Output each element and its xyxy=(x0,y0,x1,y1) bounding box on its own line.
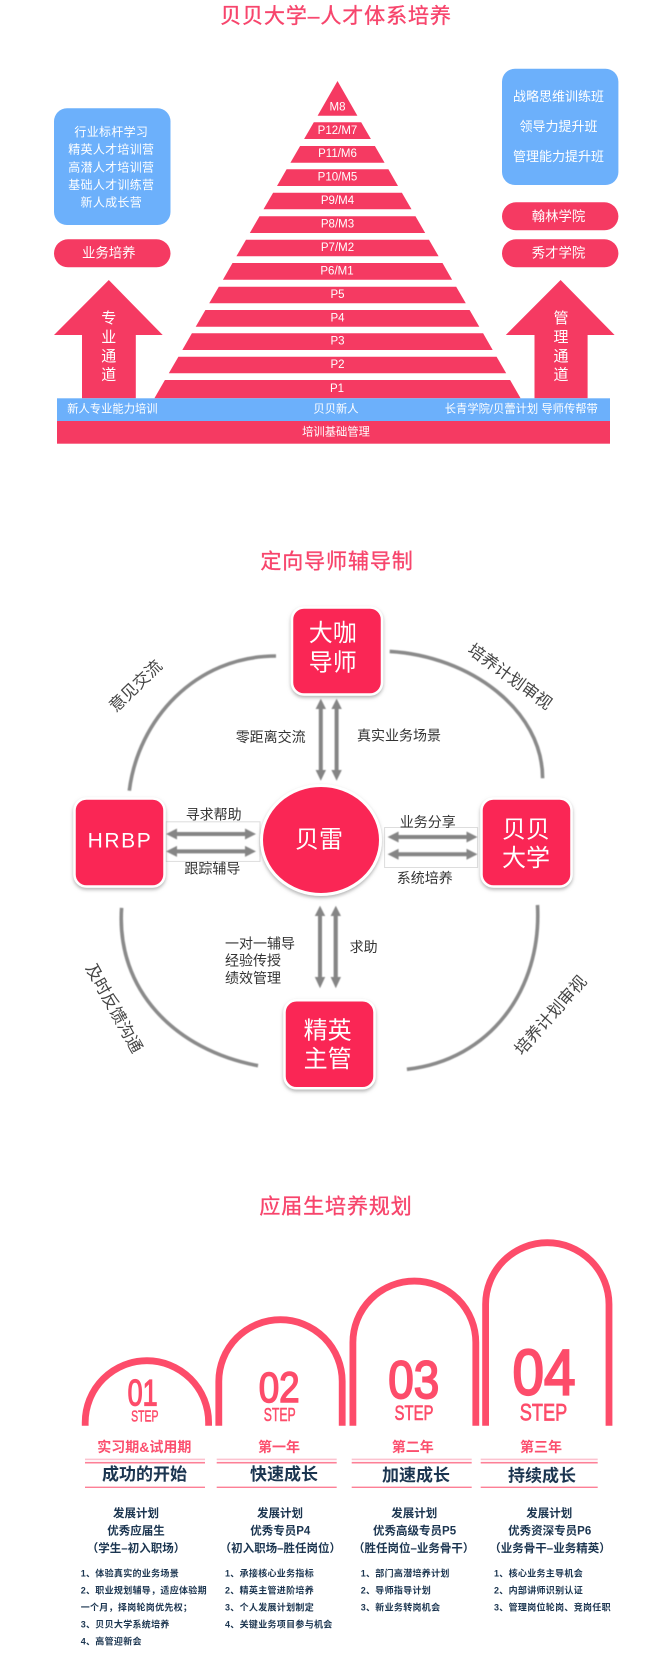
label: zero distance: 零距离交流 xyxy=(236,729,306,745)
arrow: management track: 通 xyxy=(553,348,569,365)
right blue box: management programs: 领导力提升班 xyxy=(519,119,598,134)
level P9/M4: P9/M4 xyxy=(321,195,355,207)
level P12/M7 xyxy=(304,122,371,139)
left blue box: business programs: 基础人才训练营 xyxy=(68,177,154,192)
level P11/M6: P11/M6 xyxy=(318,148,357,160)
node: Beibei University: 大学 xyxy=(502,845,550,872)
level M8: M8 xyxy=(330,101,345,113)
level P1 xyxy=(154,380,521,398)
right blue box: management programs: 战略思维训练班 xyxy=(513,89,604,104)
arrow: management track xyxy=(506,280,615,398)
step 1 arch xyxy=(85,1361,209,1426)
title: graduate plan: 应届生培养规划 xyxy=(259,1196,413,1218)
label: seek help: 寻求帮助 xyxy=(186,807,242,823)
right blue box: management programs xyxy=(502,69,618,185)
left blue box: business programs: 精英人才培训营 xyxy=(68,142,154,157)
column 2: 1、承接核心业务指标 xyxy=(225,1567,314,1578)
panel: graduate plan xyxy=(81,1196,611,1647)
pill: business training xyxy=(54,239,170,267)
node: elite supervisor: 精英 xyxy=(304,1018,352,1044)
level P11/M6 xyxy=(290,146,385,163)
node: Beilei center: 贝雷 xyxy=(295,826,343,854)
horizontal arrows left xyxy=(166,828,256,857)
node: HRBP: HRBP xyxy=(88,830,152,852)
node: Beilei center xyxy=(262,786,380,894)
blue base bar xyxy=(57,398,610,421)
left blue box: business programs: 行业标杆学习 xyxy=(74,124,148,139)
title: talent system: 贝贝大学–人才体系培养 xyxy=(220,5,452,28)
column 3: 第二年 xyxy=(392,1439,434,1455)
step 3 arch xyxy=(353,1281,476,1426)
arc label: timely feedback: 及时反馈沟通 xyxy=(82,960,146,1056)
level P12/M7: P12/M7 xyxy=(318,125,357,137)
blue base bar: 长青学院/贝蕾计划 导师传帮带 xyxy=(445,402,598,416)
arrow: professional track: 专 xyxy=(101,310,116,327)
step 2 arch: 02 xyxy=(259,1364,300,1412)
level P7/M2 xyxy=(236,240,439,256)
column 2: 快速成长 xyxy=(250,1464,318,1484)
column 3: 1、部门高潜培养计划 xyxy=(361,1567,450,1578)
blue base bar: 贝贝新人 xyxy=(313,402,359,416)
red base bar: 培训基础管理 xyxy=(302,424,370,438)
label: ask for help: 求助 xyxy=(350,939,378,955)
column 1: 1、体验真实的业务场景 xyxy=(81,1567,179,1578)
connector outlines xyxy=(166,822,478,868)
level P10/M5: P10/M5 xyxy=(318,172,357,184)
column 4: 3、管理岗位轮岗、竞岗任职 xyxy=(494,1602,611,1613)
vertical arrows upper xyxy=(316,699,342,781)
pill: Hanlin academy: 翰林学院 xyxy=(532,209,585,224)
step 3 arch: STEP xyxy=(394,1402,434,1425)
arrow: professional track: 通 xyxy=(101,348,116,365)
arrow: professional track: 业 xyxy=(101,329,116,346)
level P10/M5 xyxy=(277,169,398,186)
level P5: P5 xyxy=(330,289,345,301)
label: tracking: 跟踪辅导 xyxy=(184,861,240,877)
node: Beibei University: 贝贝 xyxy=(502,816,550,844)
node: HRBP xyxy=(74,798,164,886)
level P7/M2: P7/M2 xyxy=(321,242,354,254)
column 3: 优秀高级专员P5 xyxy=(373,1524,457,1538)
node: elite supervisor xyxy=(284,1000,374,1088)
label: business sharing: 业务分享 xyxy=(400,814,456,830)
column 1: 成功的开始 xyxy=(102,1464,187,1484)
column 4: 发展计划 xyxy=(526,1506,572,1520)
arc label: exchange views: 意见交流 xyxy=(105,656,166,716)
column 1: 4、高管迎新会 xyxy=(81,1636,142,1647)
column 2: （初入职场–胜任岗位） xyxy=(220,1541,341,1555)
pill: Hanlin academy xyxy=(502,202,618,230)
arrow: management track: 管 xyxy=(553,310,569,327)
column 1: 实习期&试用期 xyxy=(97,1439,191,1455)
level P4: P4 xyxy=(330,313,345,325)
step 2 arch xyxy=(219,1320,342,1426)
node: elite supervisor: 主管 xyxy=(304,1046,352,1073)
arc label: plan review top: 培养计划审视 xyxy=(464,640,556,713)
column 4 xyxy=(481,1439,611,1613)
level P4 xyxy=(196,310,479,327)
node: Beibei University xyxy=(482,798,572,886)
node: senior mentor: 大咖 xyxy=(309,620,357,647)
node: senior mentor xyxy=(292,608,382,694)
column 2 xyxy=(217,1439,341,1630)
label: system training: 系统培养 xyxy=(397,870,453,886)
column 1: 优秀应届生 xyxy=(107,1524,165,1538)
node: senior mentor: 导师 xyxy=(309,649,357,676)
column 2: 4、关键业务项目参与机会 xyxy=(225,1619,333,1630)
blue base bar: 新人专业能力培训 xyxy=(67,402,158,416)
arrow: professional track xyxy=(54,280,163,398)
column 4: 2、内部讲师识别认证 xyxy=(494,1585,583,1596)
column 4: 持续成长 xyxy=(508,1466,576,1486)
column 4: 1、核心业务主导机会 xyxy=(494,1567,583,1578)
label: coaching list xyxy=(225,936,295,986)
outer arcs xyxy=(121,651,543,1069)
level P1: P1 xyxy=(330,383,344,395)
label: coaching list: 绩效管理 xyxy=(225,970,281,986)
step 4 arch: STEP xyxy=(520,1400,567,1427)
level P3: P3 xyxy=(330,336,345,348)
level P9/M4 xyxy=(264,193,412,209)
step 4 arch: 04 xyxy=(512,1336,576,1408)
label: real scenes: 真实业务场景 xyxy=(357,727,441,743)
red base bar xyxy=(57,421,610,444)
column 1: （学生–初入职场） xyxy=(87,1541,185,1555)
level P6/M1: P6/M1 xyxy=(320,266,354,278)
label: coaching list: 一对一辅导 xyxy=(225,936,295,952)
column 1: 发展计划 xyxy=(113,1506,159,1520)
column 3: 发展计划 xyxy=(391,1506,437,1520)
arrow: professional track: 道 xyxy=(101,366,116,384)
level P2: P2 xyxy=(330,359,345,371)
column 3: 加速成长 xyxy=(382,1465,450,1485)
level P5 xyxy=(209,287,466,303)
column 1: 3、贝贝大学系统培养 xyxy=(81,1619,170,1630)
pill: Xiucai academy xyxy=(502,239,618,267)
level P8/M3: P8/M3 xyxy=(321,218,354,230)
step 2 arch: STEP xyxy=(264,1405,296,1425)
column 2: 2、精英主管进阶培养 xyxy=(225,1585,314,1596)
level P2 xyxy=(169,357,506,373)
level M8 xyxy=(318,81,357,116)
column 3: （胜任岗位–业务骨干） xyxy=(353,1541,474,1555)
column 4: （业务骨干–业务精英） xyxy=(489,1541,611,1555)
column 1 xyxy=(81,1439,207,1647)
arrow: management track: 理 xyxy=(553,329,569,346)
left blue box: business programs xyxy=(54,108,170,225)
arrow: management track: 道 xyxy=(553,366,569,384)
pill: business training: 业务培养 xyxy=(82,246,136,260)
column 4: 第三年 xyxy=(520,1439,562,1455)
column 1: 2、职业规划辅导，适应体验期 xyxy=(81,1585,207,1596)
left blue box: business programs: 高潜人才培训营 xyxy=(68,159,154,174)
horizontal arrows right xyxy=(388,832,478,860)
step 3 arch: 03 xyxy=(388,1351,439,1410)
arc label: plan review bottom: 培养计划审视 xyxy=(511,972,591,1059)
vertical arrows lower xyxy=(315,906,341,988)
column 1: 一个月，择岗轮岗优先权； xyxy=(81,1602,192,1614)
column 2: 优秀专员P4 xyxy=(250,1524,311,1538)
column 3: 3、新业务转岗机会 xyxy=(361,1602,440,1613)
panel: mentorship system xyxy=(74,550,591,1088)
panel: talent system xyxy=(54,5,618,444)
column 2: 发展计划 xyxy=(257,1506,303,1520)
column 2: 3、个人发展计划制定 xyxy=(225,1602,314,1613)
label: coaching list: 经验传授 xyxy=(225,953,281,969)
pyramid xyxy=(154,81,521,398)
right blue box: management programs: 管理能力提升班 xyxy=(513,149,604,164)
level P8/M3 xyxy=(250,216,425,233)
level P3 xyxy=(182,333,493,350)
step 1 arch: 01 xyxy=(128,1372,158,1414)
column 3 xyxy=(352,1439,474,1613)
level P6/M1 xyxy=(223,263,452,280)
step 4 arch xyxy=(486,1243,609,1427)
column 4: 优秀资深专员P6 xyxy=(508,1524,591,1538)
pill: Xiucai academy: 秀才学院 xyxy=(532,246,585,260)
step 1 arch: STEP xyxy=(131,1408,158,1425)
column 3: 2、导师指导计划 xyxy=(361,1585,431,1596)
left blue box: business programs: 新人成长营 xyxy=(81,195,142,210)
column 2: 第一年 xyxy=(258,1439,300,1455)
title: mentorship: 定向导师辅导制 xyxy=(260,550,414,574)
